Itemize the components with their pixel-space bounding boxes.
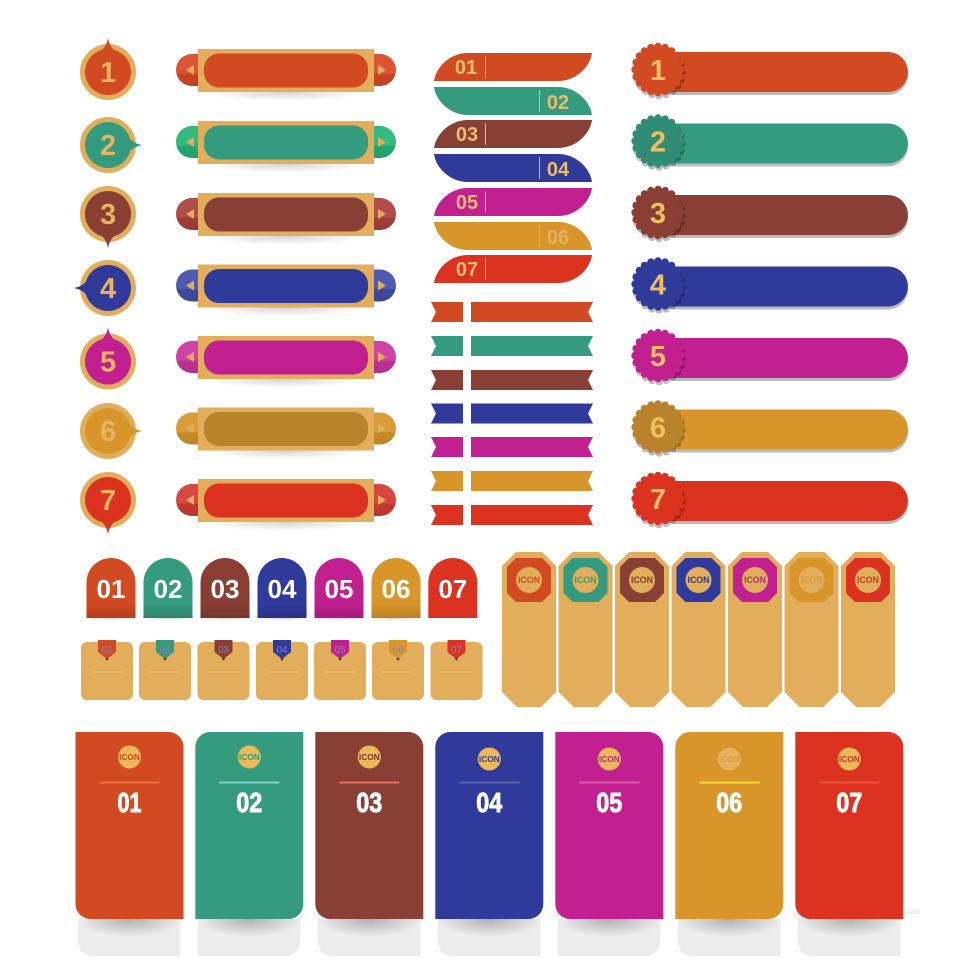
large card 04: 04 — [476, 787, 503, 818]
badge bar 5: 5 — [650, 341, 666, 373]
tab 02 — [137, 558, 199, 621]
large card 05: 05 — [596, 787, 622, 818]
circle marker 5 — [80, 328, 136, 390]
large card 07: 07 — [836, 787, 862, 818]
large card 05 — [555, 732, 663, 956]
octagon card 2 — [558, 552, 612, 707]
panel: tan note cards with tags — [81, 640, 482, 700]
tab 06 — [365, 558, 427, 621]
octagon card 3: ICON — [631, 575, 653, 585]
circle marker 2: 2 — [100, 130, 116, 162]
leaf banner 01 — [434, 53, 592, 81]
circle marker 5: 5 — [100, 346, 116, 378]
circle marker 1: 1 — [100, 57, 116, 89]
large card 04 — [435, 732, 543, 956]
tab 01: 01 — [97, 574, 125, 604]
pill button 1 — [176, 49, 396, 101]
octagon card 1: ICON — [518, 575, 540, 585]
circle marker 7 — [80, 472, 136, 534]
note card 03 — [198, 640, 250, 700]
circle marker 7: 7 — [100, 485, 116, 517]
pill button 7 — [176, 479, 396, 531]
circle marker 2 — [80, 117, 142, 173]
leaf banner 06 — [434, 222, 592, 250]
octagon card 1 — [502, 552, 556, 707]
octagon card 2: ICON — [574, 575, 596, 585]
tab 03 — [194, 558, 256, 621]
large card 01 — [76, 732, 184, 956]
ribbon 2 — [431, 336, 593, 356]
leaf banner 06: 06 — [547, 227, 569, 249]
note card 05 — [314, 640, 366, 700]
leaf banner 01: 01 — [455, 57, 477, 79]
leaf banner 04 — [434, 154, 592, 182]
circle marker 1 — [80, 38, 136, 100]
note card 02 — [139, 640, 191, 700]
leaf banner 07 — [434, 255, 592, 283]
badge bar 7: 7 — [650, 484, 666, 516]
panel: numbered circle markers — [74, 38, 142, 534]
panel: framed pill buttons — [176, 49, 396, 531]
badge bar 4 — [631, 257, 908, 314]
large card 02 — [195, 732, 303, 956]
large card 01: ICON — [119, 752, 140, 762]
note card 04 — [256, 640, 308, 700]
badge bar 1 — [631, 43, 908, 99]
ribbon 6 — [431, 471, 593, 491]
leaf banner 02 — [434, 87, 592, 115]
note card 04: 04 — [276, 645, 288, 656]
note card 02: 02 — [159, 645, 171, 656]
octagon card 3 — [615, 552, 669, 707]
circle marker 6: 6 — [100, 416, 116, 448]
leaf banner 03 — [434, 120, 592, 148]
octagon card 7 — [841, 552, 895, 707]
circle marker 4: 4 — [100, 273, 116, 305]
tab 04 — [251, 558, 313, 621]
large card 07: ICON — [839, 754, 860, 764]
pill button 5 — [176, 336, 396, 388]
tab 02: 02 — [154, 574, 182, 604]
panel: notched ribbons — [431, 302, 593, 525]
note card 07 — [430, 640, 482, 700]
octagon card 6: ICON — [800, 575, 822, 585]
large card 02: 02 — [236, 787, 262, 818]
leaf banner 04: 04 — [547, 159, 570, 181]
ribbon 5 — [431, 437, 593, 457]
badge bar 1: 1 — [650, 55, 666, 87]
large card 04: ICON — [479, 754, 500, 764]
octagon card 5: ICON — [744, 575, 766, 585]
tab 03: 03 — [211, 574, 239, 604]
tab 05: 05 — [325, 574, 353, 604]
circle marker 6 — [80, 403, 142, 459]
circle marker 3: 3 — [100, 199, 116, 231]
note card 06: 06 — [392, 645, 404, 656]
large card 01: 01 — [118, 787, 142, 818]
large card 06 — [675, 732, 783, 956]
large card 03: 03 — [356, 787, 382, 818]
pill button 3 — [176, 193, 396, 245]
tab 05 — [308, 558, 370, 621]
note card 07: 07 — [451, 645, 462, 656]
tab 04: 04 — [268, 574, 297, 604]
tab 01 — [80, 558, 142, 621]
large card 06: ICON — [719, 754, 740, 764]
leaf banner 02: 02 — [547, 92, 569, 114]
large card 03: ICON — [359, 752, 380, 762]
note card 05: 05 — [334, 645, 346, 656]
leaf banner 05: 05 — [456, 192, 478, 214]
tab 07 — [428, 558, 477, 618]
badge bar 2: 2 — [650, 126, 666, 158]
large card 02: ICON — [239, 752, 260, 762]
panel: tall octagon icon cards — [502, 552, 895, 707]
ribbon 4 — [431, 404, 593, 424]
note card 01: 01 — [101, 645, 113, 656]
leaf banner 05 — [434, 188, 592, 216]
octagon card 4 — [672, 552, 726, 707]
badge bar 5 — [631, 329, 908, 385]
circle marker 4 — [74, 260, 136, 316]
tab 06: 06 — [382, 574, 410, 604]
note card 06 — [372, 640, 424, 700]
leaf banner 03: 03 — [456, 124, 478, 146]
large card 03 — [315, 732, 423, 956]
badge bar 6 — [631, 400, 908, 457]
pill button 6 — [176, 408, 396, 460]
pill button 4 — [176, 264, 396, 316]
panel: scalloped badge bars — [631, 43, 908, 528]
octagon card 7: ICON — [857, 575, 879, 585]
badge bar 4: 4 — [650, 270, 666, 302]
large card 05: ICON — [599, 754, 620, 764]
ribbon 1 — [431, 302, 593, 322]
tab 07: 07 — [438, 574, 467, 604]
badge bar 3 — [631, 186, 908, 242]
octagon card 6 — [784, 552, 838, 707]
panel: rounded number tabs — [80, 558, 477, 621]
badge bar 3: 3 — [650, 198, 666, 230]
badge bar 6: 6 — [650, 412, 666, 444]
note card 03: 03 — [218, 645, 229, 656]
large card 06: 06 — [716, 787, 742, 818]
badge bar 7 — [631, 472, 908, 528]
panel: large numbered cards — [76, 732, 903, 956]
note card 01 — [81, 640, 133, 700]
badge bar 2 — [631, 114, 908, 171]
ribbon 3 — [431, 370, 593, 390]
octagon card 5 — [728, 552, 782, 707]
large card 07 — [795, 732, 903, 956]
ribbon 7 — [431, 505, 593, 525]
leaf banner 07: 07 — [456, 259, 478, 281]
octagon card 4: ICON — [688, 575, 710, 585]
pill button 2 — [176, 121, 396, 173]
circle marker 3 — [80, 186, 136, 248]
panel: leaf-shaped numbered banners — [434, 53, 592, 283]
